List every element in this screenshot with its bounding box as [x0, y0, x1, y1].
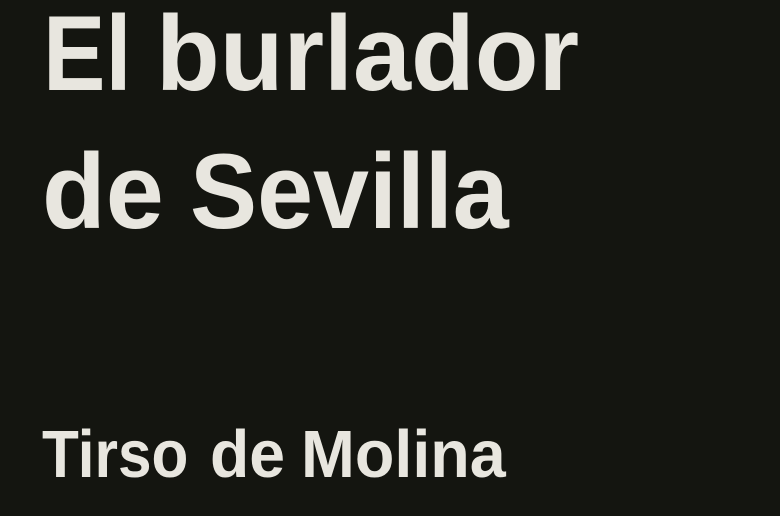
author: Tirso — [42, 417, 188, 492]
title line 2 — [42, 131, 510, 251]
author: de — [210, 417, 285, 492]
title — [42, 0, 579, 251]
title line 2: de — [42, 131, 164, 251]
author — [42, 417, 506, 492]
author: Molina — [301, 417, 506, 492]
title line 2: Sevilla — [190, 131, 509, 251]
